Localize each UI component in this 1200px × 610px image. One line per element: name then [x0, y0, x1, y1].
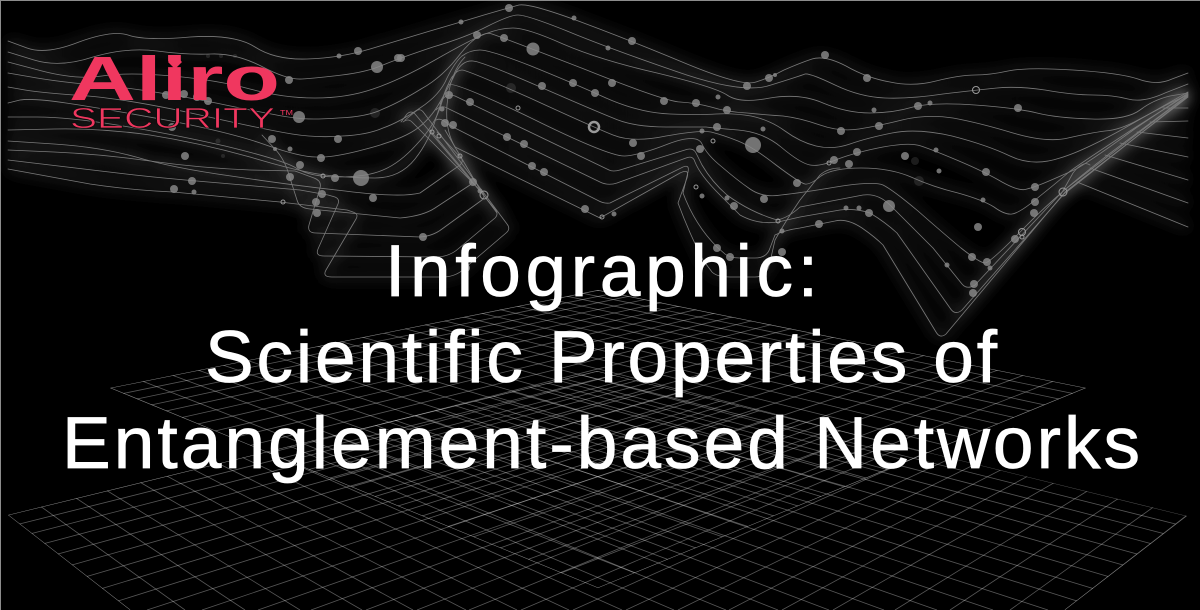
solid nodes — [162, 4, 1039, 297]
title — [62, 231, 1140, 484]
trademark: TM — [280, 110, 293, 117]
logo: Aliro Security — [69, 45, 293, 135]
faint nodes — [206, 54, 924, 186]
title line 3: Entanglement-based Networks — [62, 403, 1140, 484]
network wave lines — [8, 5, 1188, 336]
ring nodes — [281, 86, 1067, 239]
title line 1: Infographic: — [385, 231, 818, 312]
logo diamond — [168, 55, 182, 69]
upper perspective grid — [110, 290, 1086, 588]
title line 2: Scientific Properties of — [205, 317, 998, 398]
logo subtitle: SECURITY — [70, 103, 275, 135]
logo wordmark: Aliro — [69, 45, 280, 114]
lower perspective grid — [8, 371, 1187, 610]
network nodes — [162, 4, 1067, 297]
